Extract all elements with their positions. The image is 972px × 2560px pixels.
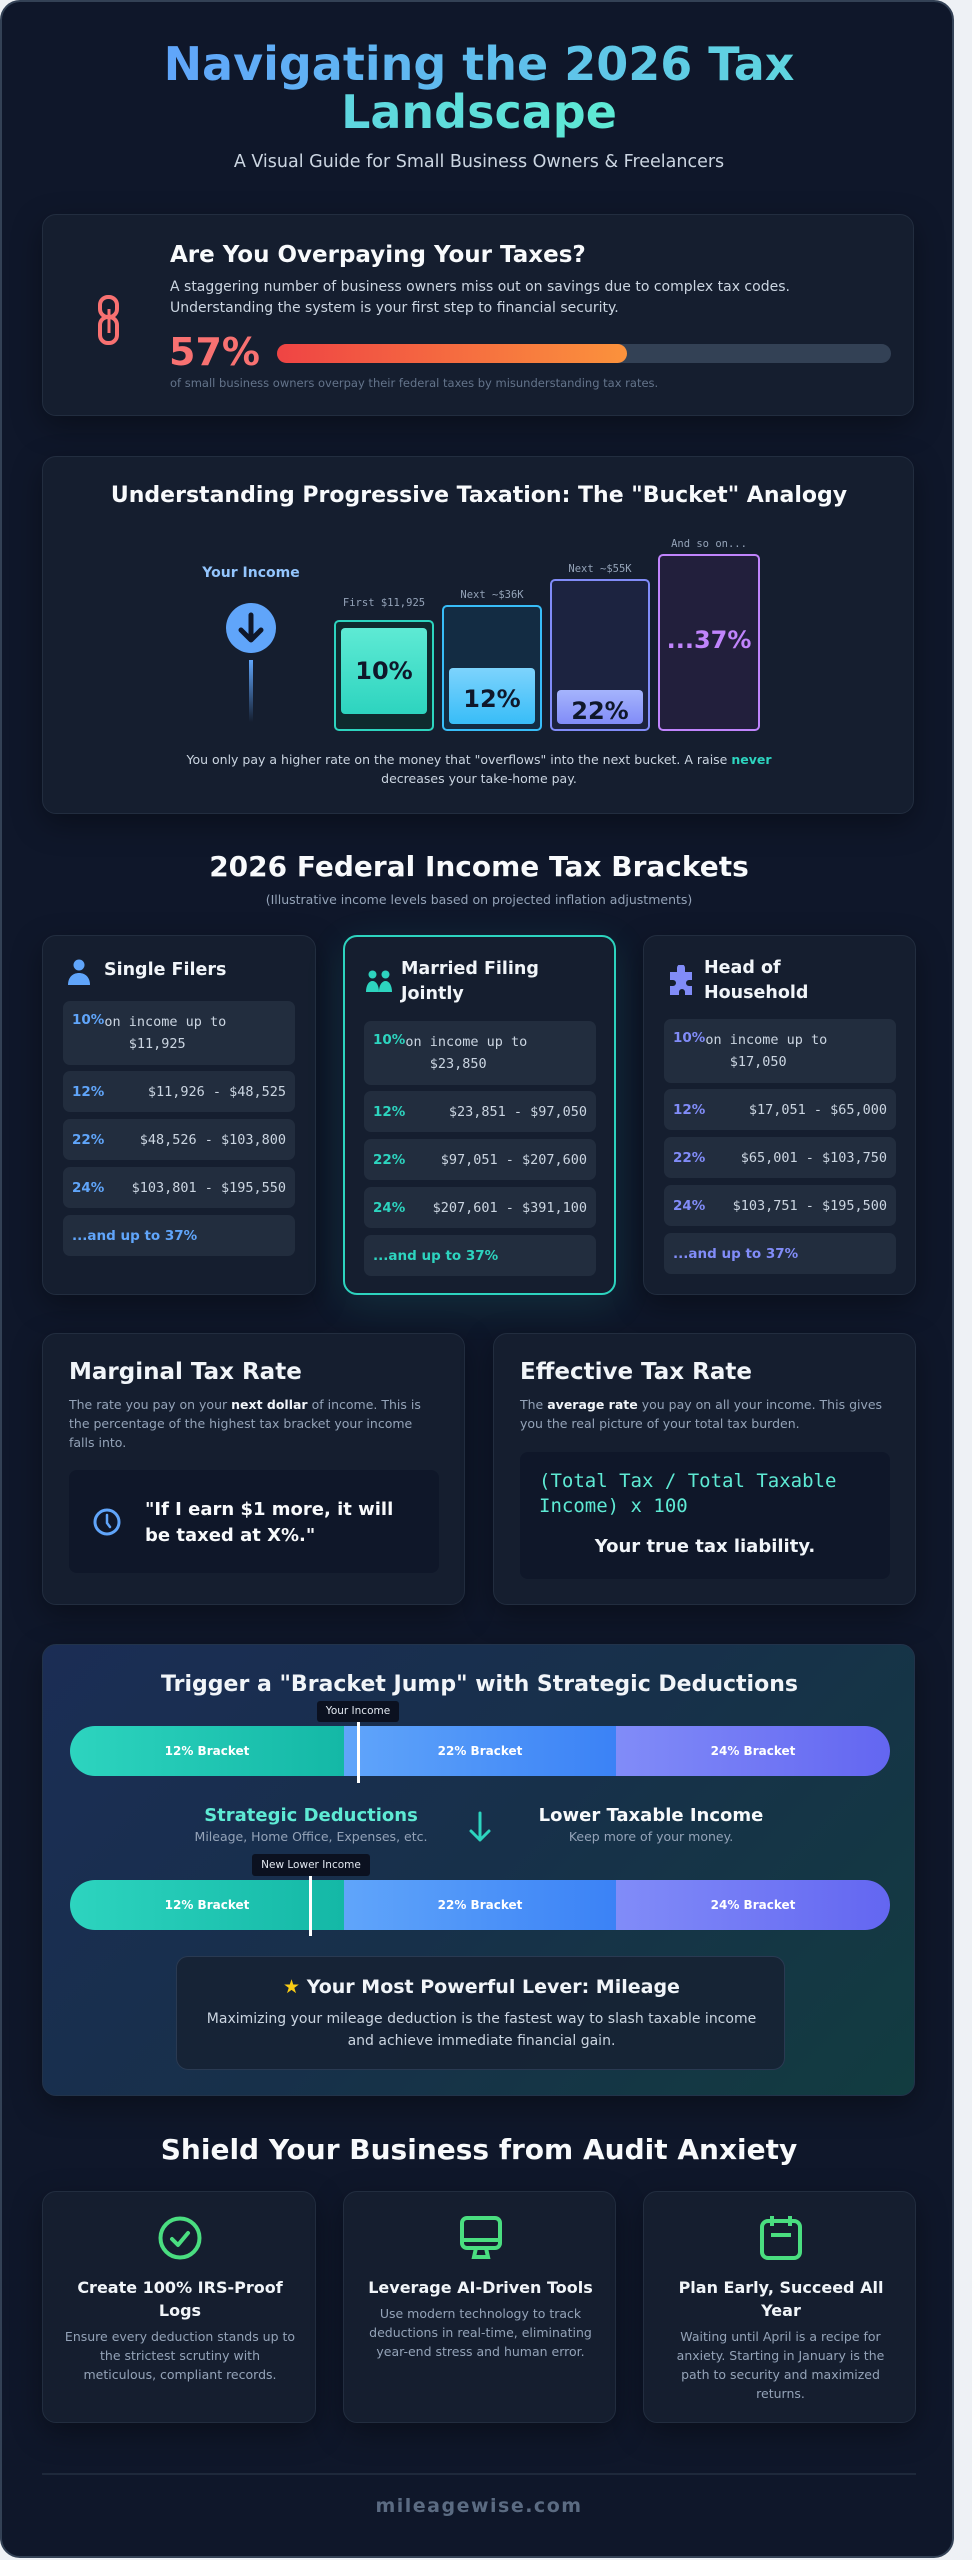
bar: before: 24% Bracket [711, 1744, 795, 1758]
rows: $103,801 - $195,550 [132, 1180, 286, 1196]
title: Landscape [341, 85, 617, 139]
lower income label: Lower Taxable Income [539, 1805, 763, 1826]
callout: mileage: Maximizing your mileage deduction is the fastest way to slash taxable income [207, 2011, 756, 2027]
bar: after [70, 1880, 890, 1930]
rows: 12% [72, 1084, 104, 1100]
panel: plan early [643, 2191, 916, 2423]
rows: $23,850 [430, 1056, 487, 1072]
panel: bucket analogy: Next ~$36K [460, 589, 524, 601]
panel: bucket analogy: And so on... [671, 538, 747, 550]
icon: clock [94, 1508, 120, 1536]
icon: monitor [460, 2216, 502, 2259]
caption: You only pay a higher rate on the money that "overflows" into the next bucket. A raise never decreases your take-home pay. [186, 752, 772, 786]
rows: 12% [373, 1104, 405, 1120]
rows: ...and up to 37% [673, 1246, 798, 1262]
title: Navigating the 2026 Tax [164, 37, 794, 91]
stat 57%: 57% [169, 330, 260, 374]
bar: before: 22% Bracket [438, 1744, 522, 1758]
rows: $97,051 - $207,600 [441, 1152, 587, 1168]
rows: 22% [673, 1150, 705, 1166]
rows: $65,001 - $103,750 [741, 1150, 887, 1166]
bucket 12% [442, 589, 542, 731]
heading: Are You Overpaying Your Taxes? [170, 242, 586, 268]
rows: 10% [673, 1030, 705, 1046]
bucket 10% [334, 597, 434, 731]
rows: ...and up to 37% [72, 1228, 197, 1244]
formula box: Income) x 100 [539, 1495, 688, 1517]
rows: 10% [373, 1032, 405, 1048]
icon: people [366, 970, 392, 992]
title [400, 959, 539, 1004]
icon: check [158, 2216, 202, 2260]
panel: bucket analogy [42, 456, 914, 814]
callout: mileage [176, 1956, 785, 2070]
caption: of small business owners overpay their federal taxes by misunderstanding tax rates. [170, 376, 658, 390]
rows: $207,601 - $391,100 [433, 1200, 587, 1216]
title: Married Filing [401, 959, 539, 979]
icon: arrow circle [226, 603, 276, 720]
rows [63, 1001, 295, 1256]
bar: after: 12% Bracket [165, 1898, 249, 1912]
panel: bracket jump [42, 1644, 915, 2096]
rows [364, 1021, 596, 1276]
panel: overpaying [42, 214, 914, 416]
title: Household [704, 983, 808, 1003]
footer: mileagewise.com [375, 2495, 583, 2517]
deductions label [195, 1805, 427, 1844]
icon: puzzle [670, 965, 692, 995]
rows: ...and up to 37% [373, 1248, 498, 1264]
panel: plan early: Year [761, 2301, 801, 2320]
quote box: "If I earn $1 more, it will [145, 1499, 393, 1520]
title: Jointly [401, 984, 464, 1004]
marker: your income: Your Income [326, 1705, 390, 1717]
icon: person [68, 960, 90, 985]
bucket 37%: ...37% [667, 626, 751, 654]
formula box [520, 1452, 890, 1579]
progress bar [277, 344, 891, 363]
rows: $17,050 [730, 1054, 787, 1070]
icon: alert [98, 295, 119, 345]
bar: before: 12% Bracket [165, 1744, 249, 1758]
rows: 22% [72, 1132, 104, 1148]
text: A staggering number of business owners miss out on savings due to complex tax codes. Understanding the system is your first step to financial security. [170, 279, 790, 316]
panel: single filers [42, 935, 316, 1295]
your income indicator [202, 565, 300, 720]
text: The rate you pay on your next dollar of income. This is the percentage of the highest tax bracket your income falls into. [69, 1397, 421, 1450]
heading: Trigger a "Bracket Jump" with Strategic Deductions [161, 1672, 798, 1697]
heading: Understanding Progressive Taxation: The "Bucket" Analogy [111, 483, 847, 508]
rows [664, 1019, 896, 1274]
deductions label: Mileage, Home Office, Expenses, etc. [195, 1829, 427, 1844]
rows: on income up to [104, 1014, 226, 1030]
panel: irs-proof logs: Ensure every deduction stands up to the strictest scrutiny with meticulous, compliant records. [65, 2329, 295, 2382]
panel: marginal tax rate [42, 1333, 465, 1605]
lower income label: Keep more of your money. [569, 1829, 733, 1844]
callout: mileage: and achieve immediate financial gain. [348, 2033, 615, 2049]
panel: plan early: Plan Early, Succeed All [679, 2278, 883, 2297]
marker: new lower income: New Lower Income [261, 1859, 361, 1871]
panel: head of household [643, 935, 916, 1295]
panel: plan early: Waiting until April is a recipe for anxiety. Starting in January is the path to security and maximized returns. [677, 2329, 884, 2401]
title [164, 37, 794, 139]
rows: $103,751 - $195,500 [733, 1198, 887, 1214]
title: Single Filers [104, 960, 226, 980]
heading: Marginal Tax Rate [69, 1359, 302, 1385]
panel: married filing jointly [343, 935, 616, 1295]
arrow [469, 1812, 490, 1842]
bar: after: 22% Bracket [438, 1898, 522, 1912]
rows: $48,526 - $103,800 [140, 1132, 286, 1148]
marker: new lower income [252, 1854, 370, 1936]
bucket 22%: 22% [571, 697, 629, 725]
panel: bucket analogy: Next ~$55K [568, 563, 632, 575]
bucket 22% [550, 563, 650, 731]
rows: 12% [673, 1102, 705, 1118]
formula box: (Total Tax / Total Taxable [539, 1470, 836, 1492]
bucket 10%: 10% [355, 657, 413, 685]
panel: ai tools: Use modern technology to track deductions in real-time, eliminating year-end stress and human error. [369, 2306, 592, 2359]
panel: irs-proof logs: Create 100% IRS-Proof [77, 2278, 283, 2297]
title [704, 958, 808, 1003]
panel: ai tools: Leverage AI-Driven Tools [368, 2278, 593, 2297]
heading: brackets: 2026 Federal Income Tax Brackets [209, 850, 749, 883]
bar: before [70, 1726, 890, 1776]
rows: 24% [72, 1180, 104, 1196]
icon: calendar [760, 2216, 802, 2260]
deductions label: Strategic Deductions [204, 1805, 418, 1826]
quote box [69, 1470, 439, 1573]
quote box: be taxed at X%." [145, 1525, 315, 1546]
subheading: (Illustrative income levels based on projected inflation adjustments) [266, 892, 692, 907]
panel: irs-proof logs [42, 2191, 316, 2423]
rows: 24% [373, 1200, 405, 1216]
heading: Effective Tax Rate [520, 1359, 752, 1385]
panel: bucket analogy: First $11,925 [343, 597, 425, 609]
your income indicator: Your Income [202, 565, 300, 581]
rows: on income up to [705, 1032, 827, 1048]
rows: $23,851 - $97,050 [449, 1104, 587, 1120]
rows: on income up to [405, 1034, 527, 1050]
subtitle: A Visual Guide for Small Business Owners & Freelancers [234, 152, 724, 172]
lower income label [539, 1805, 763, 1844]
bucket 12%: 12% [463, 685, 521, 713]
title: Head of [704, 958, 781, 978]
panel: effective tax rate [493, 1333, 916, 1605]
callout: mileage: ★ Your Most Powerful Lever: Mileage [283, 1976, 680, 1998]
panel: irs-proof logs: Logs [159, 2301, 201, 2320]
bar: after: 24% Bracket [711, 1898, 795, 1912]
heading: shield: Shield Your Business from Audit Anxiety [161, 2133, 797, 2166]
formula box: Your true tax liability. [595, 1536, 815, 1557]
panel: ai tools [343, 2191, 616, 2423]
rows: $11,925 [129, 1036, 186, 1052]
marker: your income [317, 1701, 399, 1783]
bucket 37% [658, 538, 760, 731]
rows: 24% [673, 1198, 705, 1214]
rows: $11,926 - $48,525 [148, 1084, 286, 1100]
rows: $17,051 - $65,000 [749, 1102, 887, 1118]
rows: 22% [373, 1152, 405, 1168]
rows: 10% [72, 1012, 104, 1028]
text: The average rate you pay on all your income. This gives you the real picture of your total tax burden. [520, 1397, 882, 1431]
